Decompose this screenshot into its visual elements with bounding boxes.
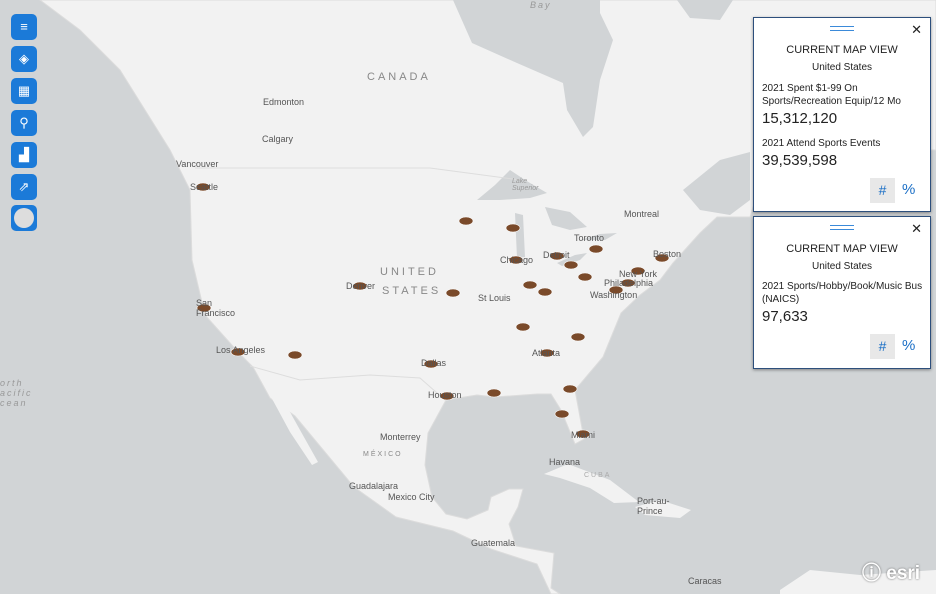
panel: current map view 1: United States: [812, 62, 872, 73]
icon: menu: ≡: [20, 19, 28, 34]
icon: layers: [11, 46, 37, 72]
text: Guadalajara: [349, 481, 398, 491]
panel: current map view 2: CURRENT MAP VIEW: [786, 243, 898, 255]
panel: current map view 2: #: [879, 338, 886, 354]
text: Chicago: [500, 255, 533, 265]
panel: current map view 1: Sports/Recreation Equip/12 Mo: [762, 96, 901, 107]
icon: layers: ◈: [19, 51, 29, 66]
hudson bay: [453, 0, 733, 137]
text: Atlanta: [532, 348, 560, 358]
panel: current map view 1: %: [902, 181, 915, 198]
panel: current map view 2: 97,633: [762, 308, 808, 325]
text: Prince: [637, 506, 663, 516]
great lakes: [477, 170, 617, 266]
text: Havana: [549, 457, 580, 467]
panel: current map view 2: 2021 Sports/Hobby/Book/Music Bus: [762, 281, 922, 292]
text: MÉXICO: [363, 451, 403, 458]
text: St Louis: [478, 293, 511, 303]
text: Vancouver: [176, 159, 218, 169]
icon: share: [11, 174, 37, 200]
text: Boston: [653, 249, 681, 259]
text: CANADA: [367, 71, 431, 83]
panel: current map view 1: 15,312,120: [762, 110, 837, 127]
icon: search: [11, 110, 37, 136]
icon: grid: [11, 78, 37, 104]
icon: share: ⇗: [19, 179, 29, 194]
text: Toronto: [574, 233, 604, 243]
text: Superior: [512, 185, 538, 192]
text: CUBA: [584, 472, 611, 479]
panel: current map view 1: [753, 17, 931, 212]
panel: current map view 2: (NAICS): [762, 294, 799, 305]
panel: current map view 1: 2021 Spent $1-99 On: [762, 83, 858, 94]
islands: [544, 464, 936, 594]
esri logo: ⓘ esri: [862, 563, 920, 584]
panel: current map view 1: CURRENT MAP VIEW: [786, 44, 898, 56]
text: Los Angeles: [216, 345, 265, 355]
text: Miami: [571, 430, 595, 440]
text: Francisco: [196, 308, 235, 318]
baja: [268, 378, 318, 465]
text: Detroit: [543, 250, 570, 260]
icon: chart: [11, 142, 37, 168]
text: Caracas: [688, 576, 722, 586]
panel: current map view 1: 2021 Attend Sports Events: [762, 138, 880, 149]
panel: current map view 1: 39,539,598: [762, 152, 837, 169]
text: Montreal: [624, 209, 659, 219]
text: Mexico City: [388, 492, 435, 502]
panel: current map view 2: %: [902, 337, 915, 354]
text: Washington: [590, 290, 637, 300]
text: Lake: [512, 178, 527, 185]
text: STATES: [382, 285, 441, 297]
panel: current map view 2: [753, 216, 931, 369]
text: Philadelphia: [604, 278, 653, 288]
text: New York: [619, 269, 657, 279]
icon: user: [11, 205, 37, 231]
text: San: [196, 298, 212, 308]
map labels: [0, 0, 722, 586]
panel: current map view 1: ✕: [911, 22, 922, 37]
toolbar: [11, 14, 37, 231]
icon: chart: ▟: [19, 147, 29, 162]
text: Edmonton: [263, 97, 304, 107]
text: cean: [0, 398, 28, 408]
text: Bay: [530, 0, 552, 10]
text: Port-au-: [637, 496, 670, 506]
text: Seattle: [190, 182, 218, 192]
text: Houston: [428, 390, 462, 400]
panel: current map view 2: ✕: [911, 221, 922, 236]
text: orth: [0, 378, 24, 388]
text: Guatemala: [471, 538, 515, 548]
st lawrence gulf: [683, 152, 750, 215]
text: Dallas: [421, 358, 446, 368]
icon: grid: ▦: [18, 83, 30, 98]
panel: current map view 2: United States: [812, 261, 872, 272]
icon: search: ⚲: [19, 115, 29, 130]
panel: current map view 1: #: [879, 182, 886, 198]
text: Monterrey: [380, 432, 421, 442]
icon: menu: [11, 14, 37, 40]
text: UNITED: [380, 266, 439, 278]
text: Denver: [346, 281, 375, 291]
text: acific: [0, 388, 33, 398]
text: Calgary: [262, 134, 293, 144]
